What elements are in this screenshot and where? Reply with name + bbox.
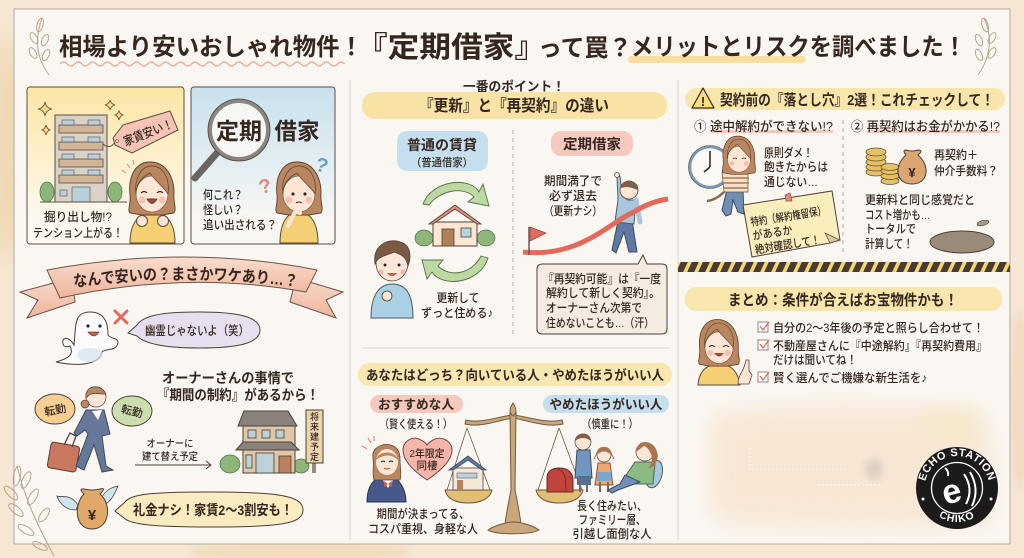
text: cannot cancel bbox=[764, 145, 828, 189]
arrow with label: オーナーに bbox=[146, 438, 194, 450]
caption bbox=[33, 209, 123, 240]
bubble: not a ghost: 幽霊じゃないよ（笑） bbox=[145, 323, 249, 338]
checklist bbox=[758, 320, 987, 385]
text: total cost: 更新料と同じ感覚だと bbox=[865, 192, 975, 207]
icon: question marks: ? bbox=[257, 175, 274, 199]
subhead 2: ② 再契約はお金がかかる!? bbox=[851, 119, 1000, 134]
woman: happy bbox=[122, 160, 175, 243]
title: メリットとリスクを調べました！ bbox=[631, 34, 966, 61]
heading: owner's reason bbox=[157, 370, 319, 403]
icon: question marks bbox=[257, 154, 330, 199]
vertical dividers bbox=[350, 80, 678, 540]
icon: money bag with wings: ¥ bbox=[88, 507, 97, 524]
callout: re-contract note: 『再契約可能』は『一度 bbox=[543, 271, 661, 286]
heading: owner's reason: オーナーさんの事情で bbox=[162, 370, 294, 386]
checklist: 賢く選んでご機嫌な新生活を♪ bbox=[773, 370, 927, 385]
caption: 何これ？ bbox=[203, 187, 243, 202]
icon: money bag with wings bbox=[57, 486, 118, 529]
student bbox=[362, 436, 406, 502]
caption: 怪しい？ bbox=[203, 203, 243, 217]
title bbox=[59, 31, 966, 66]
caption: 追い出される？ bbox=[203, 217, 277, 232]
hazard stripe bbox=[678, 262, 1010, 272]
icon: house on scale bbox=[449, 456, 486, 490]
caption: unsuited people: 長く住みたい、 bbox=[577, 499, 647, 513]
leaf sprig: top left bbox=[27, 17, 51, 75]
man running to finish bbox=[612, 172, 640, 253]
caption: can live on: 更新して bbox=[436, 290, 480, 305]
heading: 『更新』と『再契約』の違い bbox=[419, 96, 609, 115]
sign: future rebuild: 予 bbox=[310, 442, 319, 452]
icon: house bbox=[415, 205, 495, 246]
panel: two pitfalls bbox=[685, 88, 1005, 257]
bubble: merits bbox=[115, 492, 303, 527]
checklist: 自分の2〜3年後の予定と照らし合わせて！ bbox=[773, 320, 984, 335]
icon: heart, two-year cohabitation bbox=[403, 438, 452, 480]
caption: suited people: 期間が決まってる、 bbox=[376, 506, 470, 521]
heading bbox=[362, 79, 667, 119]
speech bubble: transfer: 転勤 bbox=[43, 401, 67, 419]
text: cannot cancel: 原則ダメ！ bbox=[764, 145, 813, 160]
caption: 掘り出し物!? bbox=[44, 209, 112, 224]
woman: puzzled bbox=[276, 162, 322, 243]
caption: unsuited people bbox=[572, 499, 652, 541]
arrow with label: 建て替え予定 bbox=[142, 450, 198, 463]
icon: red cross bbox=[115, 311, 127, 323]
callout: re-contract note: 住めないことも…（汗） bbox=[546, 316, 654, 330]
icon: clock bbox=[688, 146, 732, 188]
icon: old house bbox=[220, 411, 309, 473]
icon: heart, two-year cohabitation: 同棲 bbox=[416, 459, 438, 472]
callout: re-contract note bbox=[537, 255, 667, 334]
sticky note bbox=[743, 191, 840, 257]
caption: unsuited people: ファミリー層、 bbox=[578, 513, 646, 527]
heading: あなたはどっち？向いている人・やめたほうがいい人 bbox=[366, 367, 664, 383]
icon: cycle arrows bbox=[422, 182, 489, 281]
subhead 1: ① 途中解約ができない!? bbox=[694, 119, 833, 134]
speech bubble: transfer 2 bbox=[112, 396, 152, 426]
label: recommended: おすすめな人 bbox=[378, 397, 454, 412]
text: total cost: トータルで bbox=[865, 222, 916, 236]
label: recommended: （賢く使える！） bbox=[380, 417, 452, 431]
checklist: 不動産屋さんに『中途解約』『再契約費用』 bbox=[773, 338, 987, 353]
woman pointing bbox=[698, 319, 752, 385]
text: recontract fee bbox=[934, 147, 998, 178]
leaf sprig: top right bbox=[974, 17, 998, 75]
speech bubble: transfer bbox=[35, 394, 75, 424]
icon: magnifier: 定期 bbox=[216, 118, 262, 144]
icon: ghost bbox=[56, 312, 118, 364]
caption: suited people bbox=[368, 506, 478, 536]
logo: Echo Station Chiko: ECHO STATION bbox=[918, 448, 996, 481]
sign: future rebuild: 建 bbox=[310, 431, 319, 442]
icon: sparkles bbox=[38, 100, 123, 135]
businesswoman with suitcase bbox=[47, 387, 113, 472]
text: cannot cancel: 通じない… bbox=[764, 175, 818, 189]
icon: magnifier bbox=[195, 99, 270, 178]
callout: re-contract note: 解約して新しく契約』。 bbox=[546, 285, 660, 300]
label: fixed-term lease: 定期借家 bbox=[563, 136, 621, 152]
caption: suited people: コスパ重視、身軽な人 bbox=[368, 521, 478, 536]
caption bbox=[203, 187, 277, 232]
icon: question marks: ? bbox=[313, 154, 330, 178]
panel: left comic, cheap rent bbox=[27, 87, 184, 244]
label: ordinary lease: 普通の賃貸 bbox=[407, 137, 477, 153]
price tag: 家賃安い！ bbox=[121, 116, 175, 149]
sticky note: 特約（解約権留保） bbox=[749, 203, 827, 229]
caption: can live on: ずっと住める♪ bbox=[421, 306, 493, 320]
watercolor wash bbox=[709, 404, 992, 528]
panel: left comic, what is fixed-term bbox=[191, 87, 335, 244]
heading bbox=[685, 287, 1002, 311]
title: 相場より安いおしゃれ物件！ bbox=[59, 34, 363, 61]
label: ordinary lease: （普通借家） bbox=[411, 155, 473, 169]
caption: must move out: 必ず退去 bbox=[549, 188, 597, 203]
caption: can live on bbox=[421, 290, 493, 320]
text: total cost bbox=[865, 192, 975, 251]
caption: must move out: （更新ナシ） bbox=[544, 203, 602, 218]
title: って罠？ bbox=[538, 35, 632, 62]
label: recommended bbox=[370, 395, 463, 431]
woman tied up bbox=[707, 136, 756, 216]
icon: coins and yen bag: ¥ bbox=[908, 165, 916, 180]
logo: Echo Station Chiko bbox=[916, 447, 998, 529]
label: avoid: （慎重に！） bbox=[582, 417, 638, 431]
leaf sprig: bottom left bbox=[2, 466, 54, 556]
sign: future rebuild: 来 bbox=[310, 422, 319, 432]
logo: Echo Station Chiko: e bbox=[937, 471, 966, 513]
callout: re-contract note: オーナーさん次第で bbox=[546, 300, 642, 315]
heading with warning icon bbox=[685, 88, 1005, 110]
label: avoid: やめたほうがいい人 bbox=[550, 397, 662, 412]
text: cannot cancel: 飽きたからは bbox=[764, 159, 828, 174]
ribbon banner: なんで安いの？まさかワケあり…？ bbox=[74, 266, 295, 288]
icon: school bag bbox=[547, 468, 573, 492]
sign: future rebuild: 定 bbox=[310, 452, 319, 462]
panel: renewal vs re-contract bbox=[362, 79, 668, 338]
text: total cost: コスト増かも… bbox=[865, 207, 930, 222]
caption: must move out bbox=[544, 173, 602, 218]
title: 『定期借家』 bbox=[356, 31, 546, 64]
label: ordinary lease bbox=[397, 131, 488, 171]
horizontal divider bbox=[362, 347, 670, 349]
caption: unsuited people: 引越し面倒な人 bbox=[572, 526, 652, 541]
panel: who suits bbox=[358, 363, 672, 541]
text: recontract fee: 再契約＋ bbox=[934, 147, 978, 162]
ribbon banner bbox=[18, 256, 344, 319]
sticky note: 絶対確認して！ bbox=[754, 233, 821, 257]
caption: テンション上がる！ bbox=[33, 225, 123, 240]
icon: goal tape and flag bbox=[523, 199, 668, 255]
icon: balance scale bbox=[445, 403, 583, 534]
sticky note: があるか bbox=[752, 223, 794, 243]
label: avoid bbox=[543, 395, 669, 431]
checklist: だけは聞いてね！ bbox=[773, 353, 857, 367]
logo: Echo Station Chiko: CHIKO bbox=[940, 512, 974, 522]
heading bbox=[358, 363, 672, 386]
heading with warning icon: ! bbox=[701, 94, 705, 109]
sign: future rebuild bbox=[306, 410, 323, 473]
sign: future rebuild: 将 bbox=[310, 411, 319, 422]
icon: apartment building bbox=[40, 115, 127, 202]
icon: coins and yen bag bbox=[866, 148, 926, 184]
heading: 一番のポイント！ bbox=[463, 79, 565, 94]
boy bbox=[371, 241, 413, 318]
icon: heart, two-year cohabitation: 2年限定 bbox=[410, 447, 445, 460]
family bbox=[575, 434, 665, 493]
icon: pitfall hole bbox=[930, 219, 994, 253]
bubble: not a ghost bbox=[128, 312, 260, 348]
arrow with label bbox=[135, 438, 211, 469]
word: 借家: 借家 bbox=[274, 118, 320, 144]
text: recontract fee: 仲介手数料？ bbox=[934, 163, 998, 178]
speech bubble: transfer 2: 転勤 bbox=[120, 402, 144, 420]
label: fixed-term lease bbox=[551, 131, 633, 156]
caption: must move out: 期間満了で bbox=[544, 173, 602, 188]
heading: owner's reason: 『期間の制約』があるから！ bbox=[157, 387, 319, 403]
text: total cost: 計算して！ bbox=[865, 236, 913, 251]
bubble: merits: 礼金ナシ！家賃2〜3割安も！ bbox=[133, 502, 293, 518]
price tag bbox=[103, 111, 178, 153]
heading: まとめ：条件が合えばお宝物件かも！ bbox=[728, 291, 958, 309]
panel: summary bbox=[685, 287, 1002, 385]
